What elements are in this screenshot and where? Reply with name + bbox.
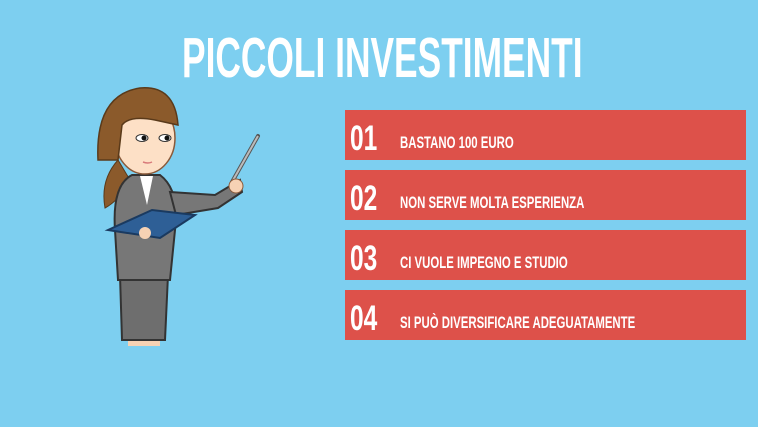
legs [128, 330, 160, 346]
jacket [115, 175, 176, 280]
arm raised [170, 180, 242, 215]
pointer stick [232, 136, 258, 182]
item 02: 02 [350, 179, 377, 218]
item 03: 03 [350, 239, 377, 278]
item 04 [345, 290, 746, 340]
ponytail [104, 160, 130, 208]
item 03: CI VUOLE IMPEGNO E STUDIO [400, 253, 568, 272]
item 01 [345, 110, 746, 160]
illustration: teacher woman [97, 87, 260, 346]
item 01: 01 [350, 119, 377, 158]
item 02 [345, 170, 746, 220]
item 01: BASTANO 100 EURO [400, 133, 514, 152]
title: PICCOLI INVESTIMENTI [182, 26, 583, 90]
book [108, 210, 195, 238]
item 03 [345, 230, 746, 280]
item 02: NON SERVE MOLTA ESPERIENZA [400, 193, 584, 212]
skirt [120, 275, 168, 340]
item 04: 04 [350, 299, 377, 338]
head [115, 102, 175, 174]
item 04: SI PUÒ DIVERSIFICARE ADEGUATAMENTE [400, 313, 635, 332]
